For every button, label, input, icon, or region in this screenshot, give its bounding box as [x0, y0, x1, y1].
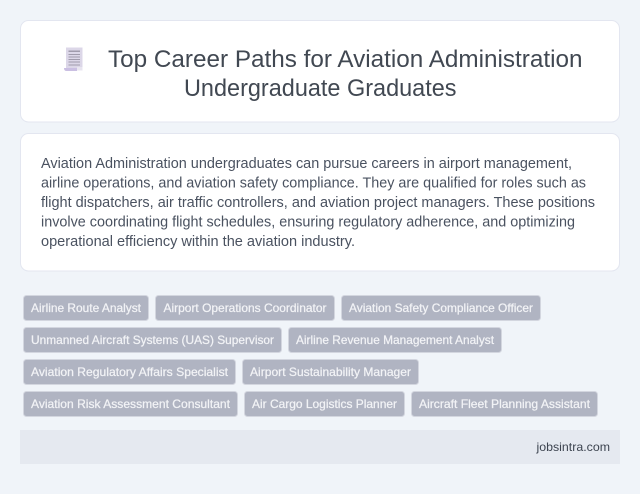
- panel: description: flight dispatchers, air traffic controllers, and aviation project managers. These positions: [41, 195, 595, 211]
- title: Undergraduate Graduates: [184, 75, 456, 102]
- tag: [24, 360, 236, 384]
- career tags: [24, 296, 598, 416]
- tag: [412, 392, 598, 416]
- tag: Airline Route Analyst: [31, 301, 142, 315]
- tag: [342, 296, 540, 320]
- tag: Aviation Risk Assessment Consultant: [31, 397, 231, 411]
- tag: [24, 296, 148, 320]
- panel: description: airline operations, and aviation safety compliance. They are qualified for roles such as: [41, 176, 586, 192]
- panel: description: involve coordinating flight schedules, ensuring regulatory adherence, and optimizing: [41, 214, 575, 230]
- tag: [24, 328, 282, 352]
- tag: Air Cargo Logistics Planner: [252, 397, 397, 411]
- tag: [24, 392, 238, 416]
- tag: [242, 360, 418, 384]
- footer: jobsintra.com: [535, 440, 610, 454]
- footer: [20, 430, 620, 464]
- tag: Airline Revenue Management Analyst: [296, 333, 495, 347]
- title: [108, 46, 582, 102]
- tag: [244, 392, 404, 416]
- tag: Aviation Regulatory Affairs Specialist: [31, 365, 229, 379]
- panel: description: Aviation Administration undergraduates can pursue careers in airport management,: [41, 156, 572, 172]
- tag: Airport Sustainability Manager: [250, 365, 411, 379]
- tag: Aircraft Fleet Planning Assistant: [419, 397, 591, 411]
- tag: Airport Operations Coordinator: [164, 301, 326, 315]
- panel: title card: [20, 20, 620, 122]
- title: Top Career Paths for Aviation Administration: [108, 46, 582, 73]
- icon: document scroll: [64, 48, 82, 71]
- tag: Aviation Safety Compliance Officer: [349, 301, 533, 315]
- tag: [156, 296, 334, 320]
- panel: description: operational efficiency within the aviation industry.: [41, 234, 355, 250]
- tag: [288, 328, 502, 352]
- panel: description: [20, 134, 620, 271]
- tag: Unmanned Aircraft Systems (UAS) Supervisor: [31, 333, 274, 347]
